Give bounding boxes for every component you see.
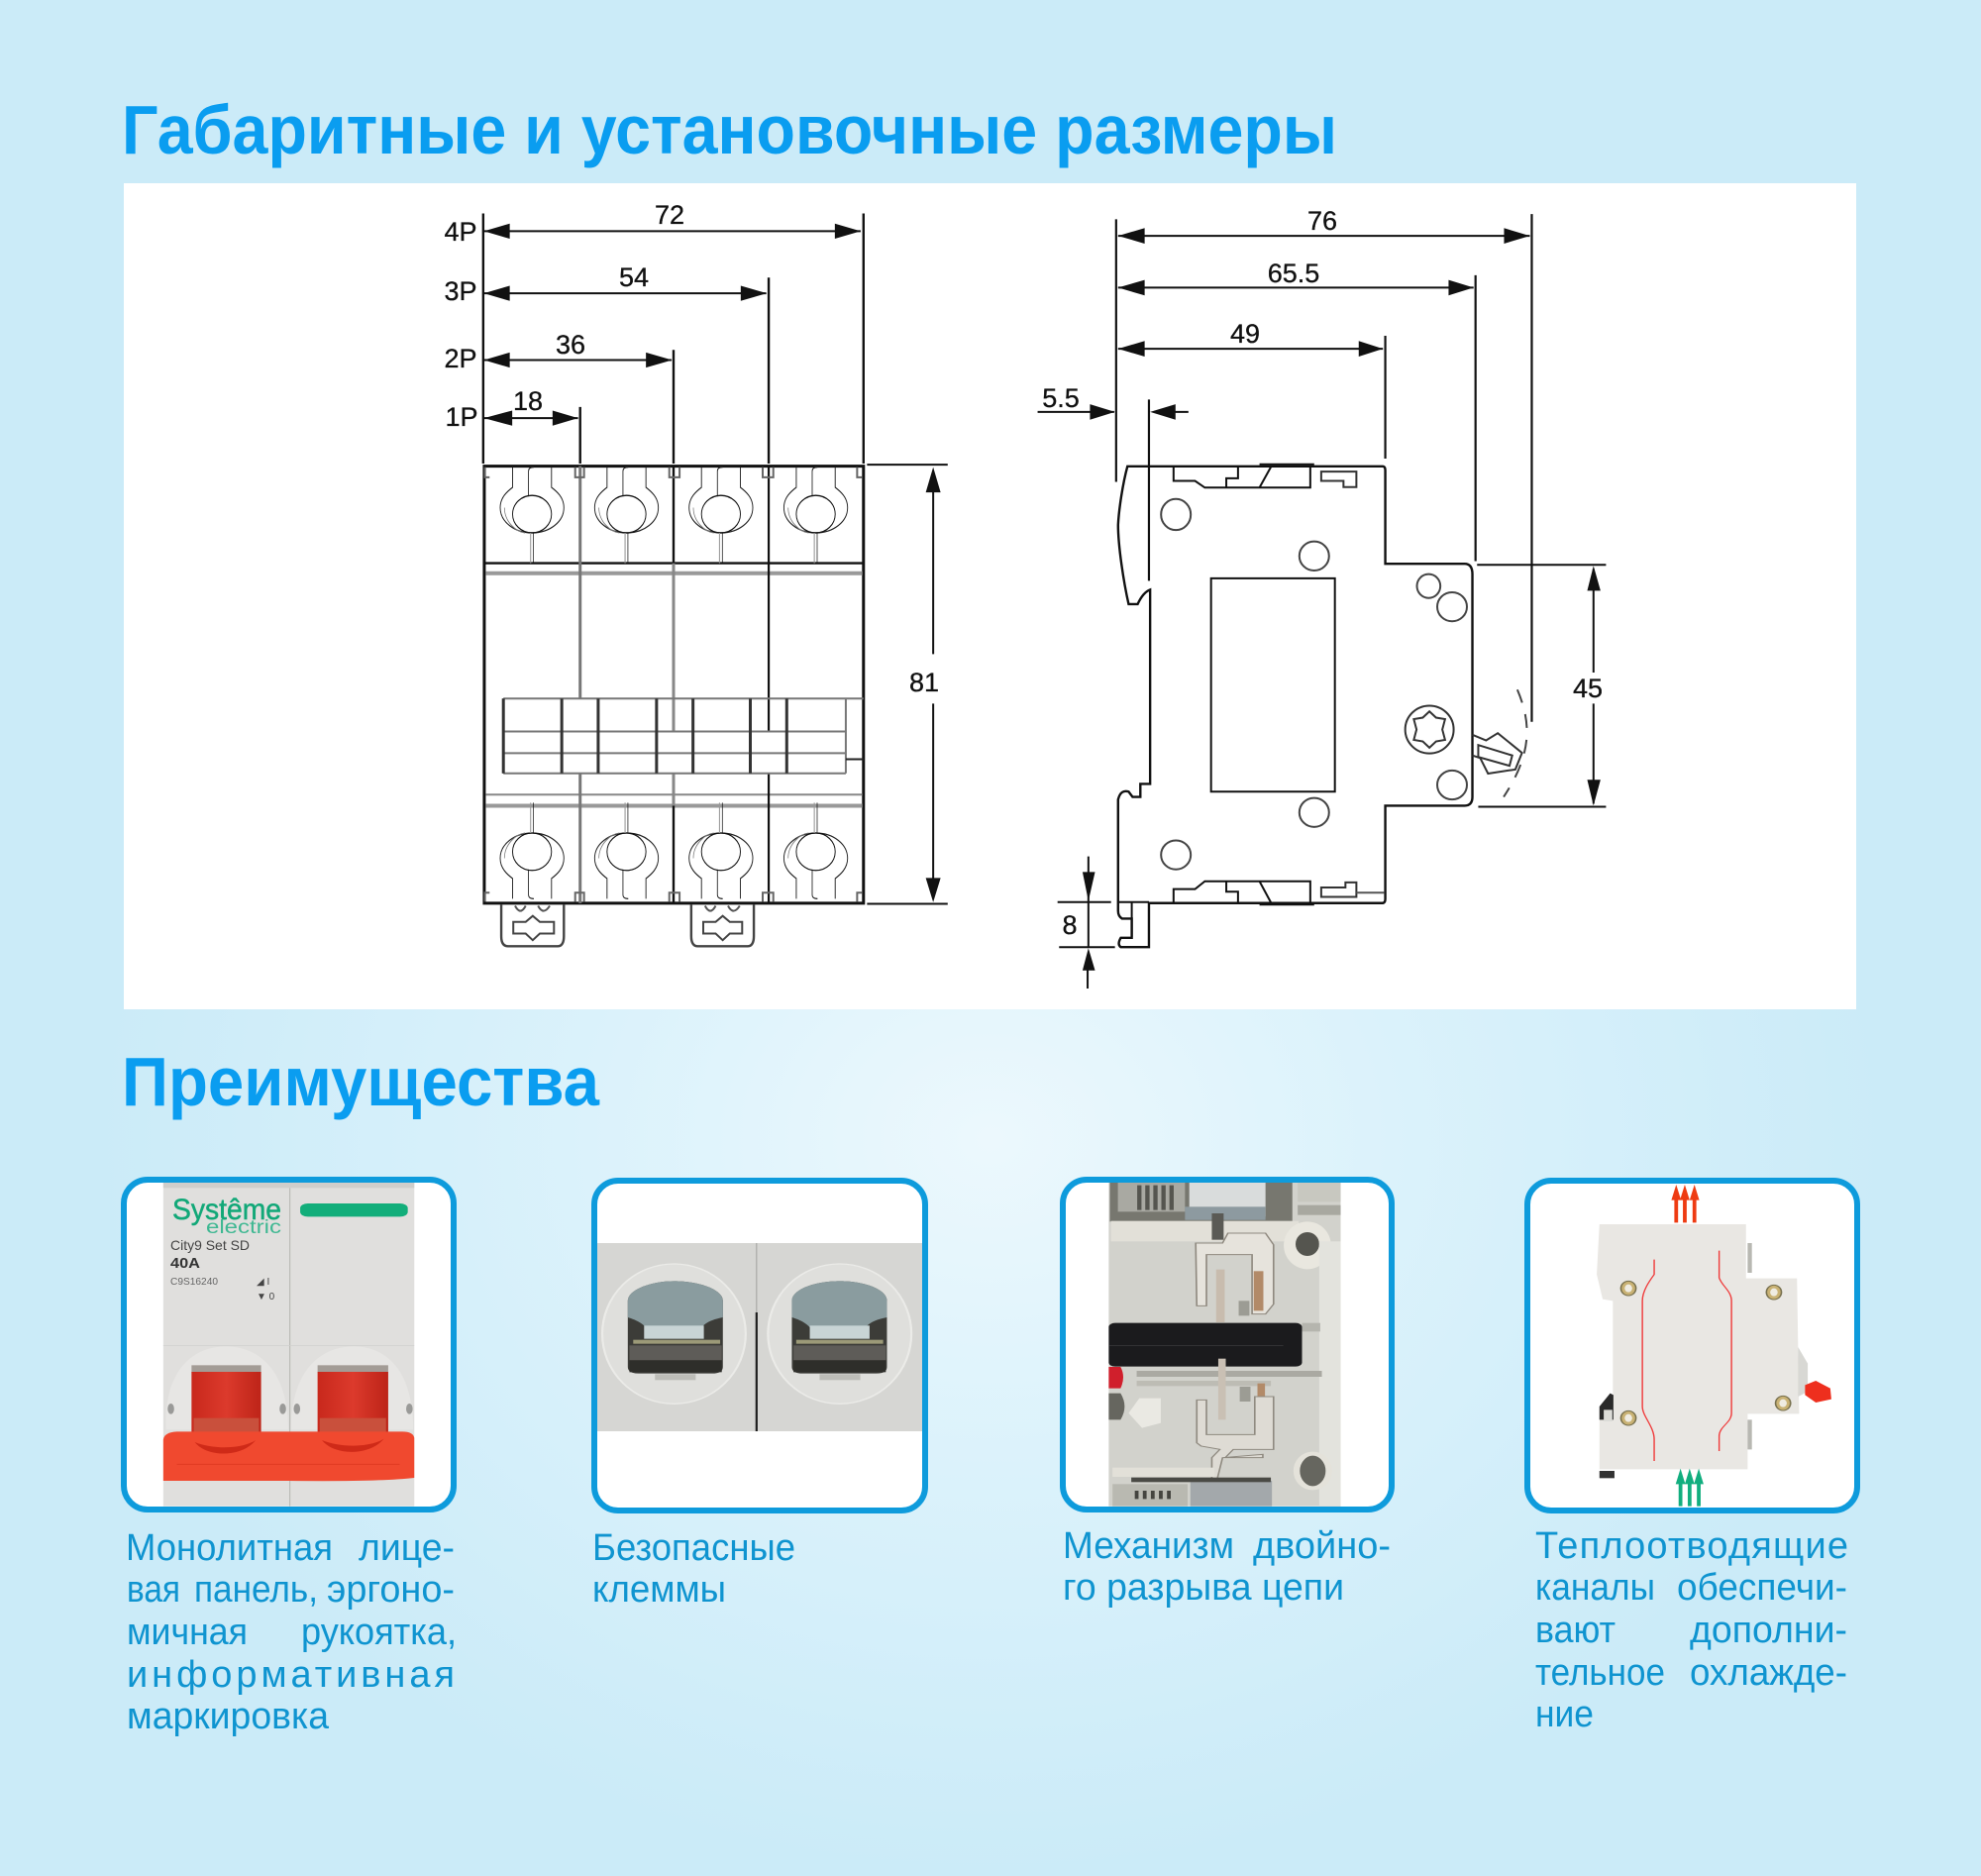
- drawing: side view of breaker: [1038, 206, 1606, 989]
- card 1: front panel photo: [124, 1180, 454, 1510]
- labels: side view dimensions: 65.5: [1268, 259, 1319, 288]
- photo: terminals: [597, 1243, 922, 1431]
- labels: front view dimensions: [444, 200, 939, 697]
- card 2: safe terminals photo: [594, 1181, 925, 1511]
- text: advantage 3: го разрыва цепи: [1063, 1567, 1344, 1609]
- labels: side view dimensions: 45: [1573, 674, 1603, 703]
- text: advantage 1: маркировка: [127, 1696, 330, 1737]
- label: product marking: electric: [206, 1217, 281, 1238]
- label: product marking: City9 Set SD: [170, 1237, 250, 1253]
- labels: front view dimensions: 36: [556, 330, 585, 360]
- label: product marking: ◢ I: [257, 1277, 269, 1288]
- text: advantage 3: Механизм: [1063, 1525, 1234, 1567]
- label: product marking: C9S16240: [170, 1277, 218, 1288]
- labels: front view dimensions: 54: [619, 262, 649, 292]
- card 4: heat dissipation channels photo: [1527, 1181, 1857, 1511]
- label: product marking: [170, 1194, 281, 1303]
- heading: advantages: Преимущества: [122, 1043, 600, 1120]
- labels: side view dimensions: 49: [1230, 319, 1260, 349]
- labels: side view dimensions: 5.5: [1042, 383, 1080, 413]
- text: advantage 1: мичная: [127, 1612, 248, 1653]
- labels: side view dimensions: 76: [1307, 206, 1337, 236]
- text: advantage 1: рукоятка,: [301, 1612, 457, 1653]
- labels: front view dimensions: 72: [655, 200, 684, 230]
- text: advantage 4: ние: [1535, 1694, 1594, 1735]
- labels: front view dimensions: 18: [513, 386, 543, 416]
- text: advantage 4: охлажде-: [1690, 1652, 1847, 1694]
- text: advantage 1: [126, 1527, 457, 1737]
- text: advantage 4: Теплоотводящие: [1535, 1525, 1848, 1567]
- photo: breaker front with red handle: [163, 1182, 414, 1507]
- card 3: double break mechanism photo: [1063, 1180, 1392, 1510]
- text: advantage 3: двойно-: [1253, 1525, 1391, 1567]
- labels: side view dimensions: [1042, 206, 1603, 940]
- title: dimensions: Габаритные и установочные размеры: [122, 91, 1337, 168]
- text: advantage 2: Безопасные: [592, 1527, 795, 1569]
- text: advantage 1: лице-: [359, 1527, 455, 1569]
- labels: front view dimensions: 2P: [444, 344, 477, 373]
- labels: front view dimensions: 1P: [445, 402, 478, 432]
- text: advantage 4: обеспечи-: [1677, 1567, 1847, 1609]
- text: advantage 4: каналы: [1535, 1567, 1655, 1609]
- text: advantage 2: [592, 1527, 795, 1611]
- text: advantage 4: [1535, 1525, 1848, 1735]
- text: advantage 1: информативная: [127, 1654, 455, 1696]
- label: product marking: Systême: [172, 1194, 281, 1226]
- labels: front view dimensions: 81: [909, 668, 939, 697]
- drawing: front view of breaker: [444, 200, 948, 946]
- labels: front view dimensions: 3P: [444, 276, 477, 306]
- label: product marking: 40A: [170, 1255, 200, 1272]
- text: advantage 4: тельное: [1535, 1652, 1665, 1694]
- text: advantage 1: Монолитная: [126, 1527, 333, 1569]
- text: advantage 2: клеммы: [592, 1569, 726, 1611]
- text: advantage 1: вая: [127, 1569, 180, 1611]
- label: product marking: ▼ 0: [257, 1292, 275, 1303]
- labels: side view dimensions: 8: [1062, 910, 1078, 940]
- text: advantage 4: дополни-: [1690, 1610, 1847, 1651]
- text: advantage 3: [1063, 1525, 1391, 1609]
- text: advantage 4: вают: [1535, 1610, 1616, 1651]
- labels: front view dimensions: 4P: [444, 217, 477, 247]
- text: advantage 1: эргоно-: [327, 1569, 455, 1611]
- text: advantage 1: панель,: [194, 1569, 318, 1611]
- photo: mechanism interior: [1108, 1182, 1341, 1507]
- panel: dimension drawings: [124, 183, 1856, 1009]
- photo: breaker side view with airflow arrows: [1597, 1185, 1831, 1507]
